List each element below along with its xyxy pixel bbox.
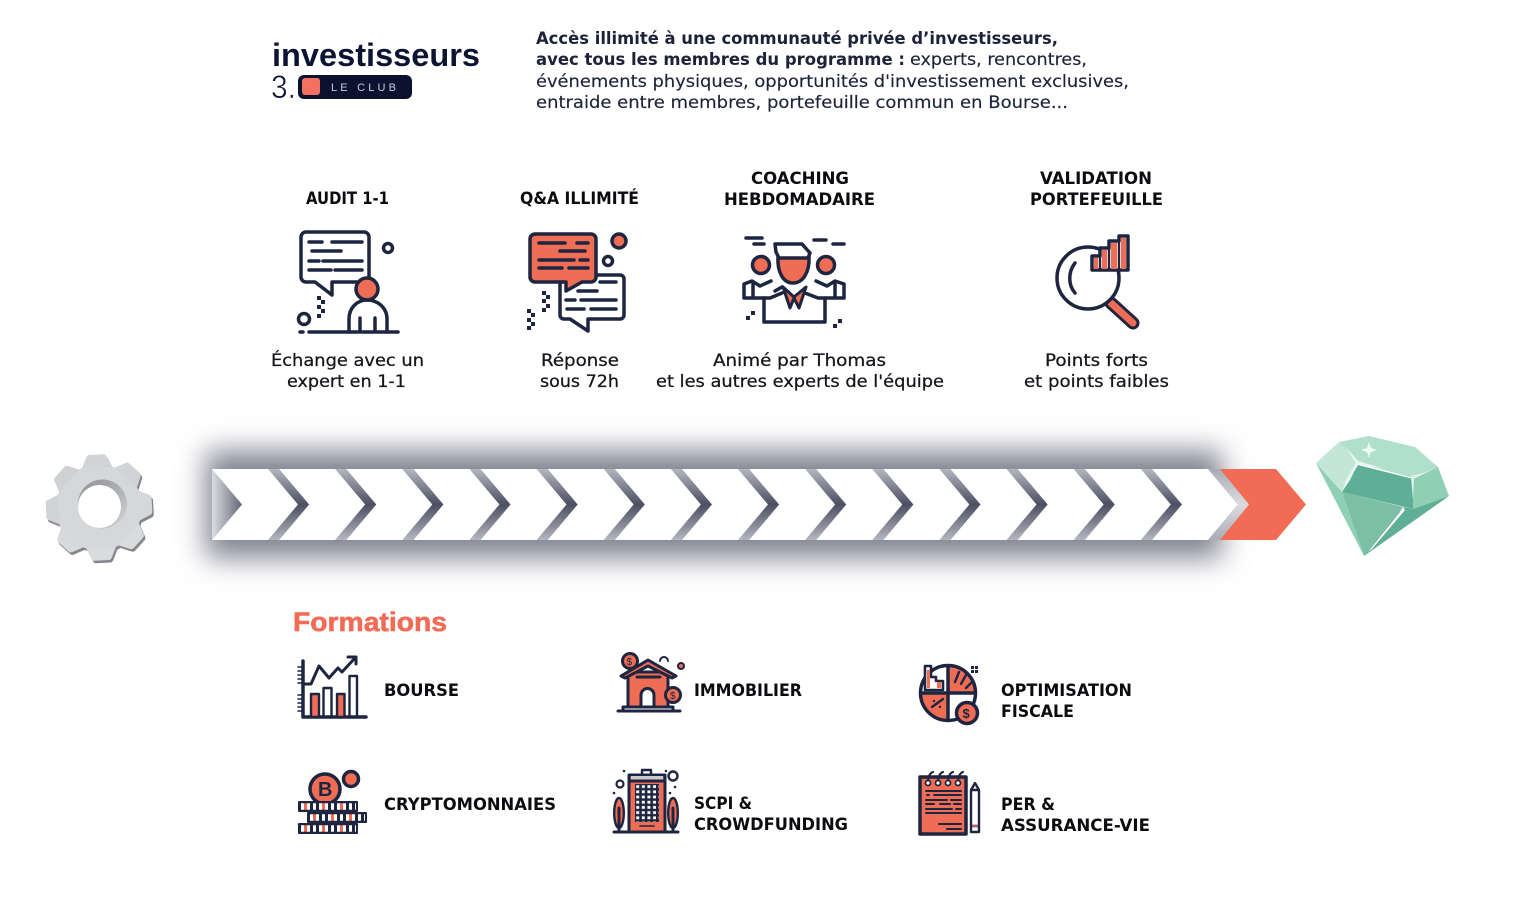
intro text block: avec tous les membres du programme : [536,50,905,70]
icon: two speech bubbles [527,234,626,331]
panel: coaching hebdomadaire [656,169,944,391]
item: scpi & crowdfunding [613,770,848,834]
logo: investisseurs 3.0 le club: LE CLUB [331,82,396,94]
item: optimisation fiscale [920,666,1132,724]
label: immobilier: IMMOBILIER [694,681,802,700]
chevron arrow band [206,451,1306,558]
label: scpi & crowdfunding: CROWDFUNDING [694,815,848,834]
description: coaching: Animé par Thomas [713,350,886,370]
description: coaching: et les autres experts de l'équipe [656,371,944,391]
icon: bitcoin stack: B [318,779,332,801]
item: per & assurance-vie [920,772,1150,835]
icon: notepad and pencil [920,772,979,834]
label: per & assurance-vie: ASSURANCE-VIE [1001,816,1150,835]
icon: team of three [744,238,844,328]
icon: 3d gear [45,454,154,564]
heading: audit: AUDIT 1-1 [306,189,389,208]
description: audit: expert en 1-1 [287,371,406,391]
description: validation: et points faibles [1024,371,1169,391]
description: q&a [540,350,619,391]
heading: coaching [724,169,875,209]
heading: validation [1030,169,1163,209]
description: validation: Points forts [1045,350,1148,370]
label: bourse: BOURSE [384,681,459,700]
panel: q&a illimité [520,189,639,391]
item: bourse [298,657,459,717]
heading: q&a: Q&A ILLIMITÉ [520,189,639,208]
heading: validation: PORTEFEUILLE [1030,190,1163,209]
icon: pie chart with coin [920,666,978,724]
logo: investisseurs 3.0 le club [271,37,480,105]
intro text block: Accès illimité à une communauté privée d’investisseurs, [536,29,1058,49]
description: q&a: Réponse [541,350,619,370]
label: per & assurance-vie: PER & [1001,795,1055,814]
intro text block: entraide entre membres, portefeuille commun en Bourse... [536,93,1068,113]
panel: audit 1-1 [271,189,424,391]
label: optimisation fiscale [1001,681,1132,721]
icon: house with coins: $ [670,691,676,702]
label: scpi & crowdfunding: SCPI & [694,794,752,813]
logo: investisseurs 3.0 le club: investisseurs [272,37,480,73]
intro text block [536,29,1129,113]
icon: magnifier with bars [1057,236,1133,323]
label: optimisation fiscale: OPTIMISATION [1001,681,1132,700]
arrow head: coral chevron [1220,469,1306,540]
description: audit [271,349,424,391]
label: per & assurance-vie [1001,795,1150,835]
heading: coaching: COACHING [751,169,849,188]
icon: bitcoin stack [298,772,367,834]
intro text block: experts, rencontres, [910,50,1087,70]
icon: speech bubble and person [298,232,398,332]
description: q&a: sous 72h [540,371,619,391]
label: optimisation fiscale: FISCALE [1001,702,1074,721]
description: validation [1024,350,1169,391]
description: coaching [656,350,944,391]
heading: validation: VALIDATION [1040,169,1152,188]
logo: investisseurs 3.0 le club: 3. [271,69,296,105]
label: cryptomonnaies: CRYPTOMONNAIES [384,795,556,814]
icon: pie chart with coin: $ [962,706,970,721]
item: cryptomonnaies [298,772,556,834]
icon: emerald diamond [1316,436,1449,556]
icon: house with coins [618,654,684,711]
icon: stock chart [298,657,366,717]
intro text block: événements physiques, opportunités d'investissement exclusives, [536,72,1129,92]
description: audit: Échange avec un [271,349,424,370]
icon: house with coins: $ [626,657,632,668]
item: immobilier [618,654,802,711]
panel: validation portefeuille [1024,169,1169,391]
heading: coaching: HEBDOMADAIRE [724,190,875,209]
icon: office building and trees [613,770,678,832]
heading: formations: Formations [293,607,447,637]
label: scpi & crowdfunding [694,794,848,834]
